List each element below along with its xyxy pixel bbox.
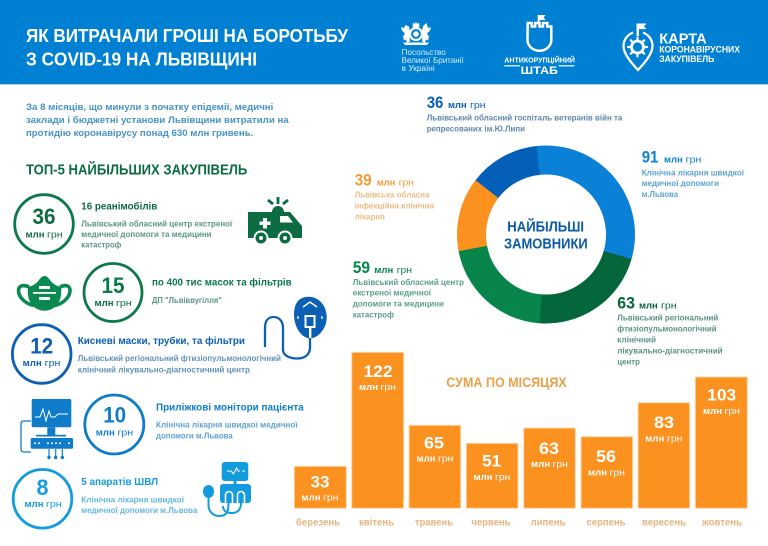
purchase 3: oxygen masks: Львівський регіональний фтизіопульмонологічний <box>78 353 281 363</box>
customer label: 39: млн <box>377 178 396 189</box>
logo: coronavirus procurement map: ЗАКУПІВЕЛЬ <box>659 54 715 64</box>
header band <box>0 0 768 85</box>
bar: вересень 83: вересень <box>642 518 686 529</box>
bar: березень 33: березень <box>296 517 340 529</box>
customer label: 39 <box>355 171 434 221</box>
logo: British embassy: Посольство <box>402 48 446 57</box>
amount circle 10: 10 <box>103 403 126 428</box>
purchase 1: ambulances: медичної допомоги та медицини <box>81 229 212 239</box>
icon: oxygen mask with tube <box>265 297 327 358</box>
purchase 4: monitors: Клінічна лікарня швидкої медичної <box>156 419 298 429</box>
bar: липень 63: грн <box>552 459 568 470</box>
donut centre label: ЗАМОВНИКИ <box>504 236 588 252</box>
bar: жовтень 103: грн <box>724 406 740 417</box>
customer label: 63: млн <box>639 300 658 311</box>
customer label: 36: репресованих ім.Ю.Липи <box>427 123 525 133</box>
purchase 1: ambulances <box>15 195 302 253</box>
customer label: 63: клінічний <box>617 334 656 344</box>
customer label: 63: грн <box>661 300 677 311</box>
customer label: 63: 63 <box>617 293 635 312</box>
purchase 4: monitors: допомоги м.Львова <box>156 430 233 440</box>
purchase 2: masks: ДП "Львіввугілля" <box>152 295 222 305</box>
bar: серпень 56: грн <box>610 468 625 479</box>
customer label: 63 <box>617 293 723 366</box>
amount circle 8: грн <box>46 499 62 510</box>
customer label: 36 <box>427 93 623 133</box>
bar chart: sum by month <box>294 352 747 529</box>
logo: British embassy: в Україні <box>402 64 435 73</box>
amount circle 10: грн <box>118 427 133 438</box>
chart title: СУМА ПО МІСЯЦЯХ <box>446 374 567 390</box>
amount circle 12: млн <box>23 358 42 369</box>
intro text: заклади і бюджетні установи Львівщини витратили на <box>26 115 289 126</box>
purchase 5: ventilators: медичної допомоги м.Львова <box>81 505 197 515</box>
bar: червень 51: червень <box>472 518 510 529</box>
customer label: 91: млн <box>664 155 683 166</box>
customer label: 39: 39 <box>355 171 372 190</box>
customer label: 39: Львівська обласна <box>355 190 430 200</box>
amount circle 36 <box>15 195 73 253</box>
customer label: 91: грн <box>686 155 701 166</box>
bar: червень 51: 51 <box>482 452 501 471</box>
bar: вересень 83: 83 <box>654 413 674 432</box>
amount circle 36: 36 <box>32 204 56 229</box>
intro text: протидію коронавірусу понад 630 млн гривень. <box>26 128 253 139</box>
bar: серпень 56: млн <box>588 468 607 479</box>
icon: ambulance <box>248 197 302 246</box>
logo: coronavirus procurement map <box>624 24 740 70</box>
customer label: 59: 59 <box>353 258 370 277</box>
title <box>26 26 349 69</box>
logo: anticorruption headquarters <box>504 15 575 77</box>
bar: квітень 122: грн <box>380 382 396 393</box>
purchase 1: ambulances: 16 реанімобілів <box>81 200 158 212</box>
logo: anticorruption headquarters: АНТИКОРУПЦІЙНИЙ <box>504 56 575 65</box>
customer label: 59: допомоги та медицини <box>353 299 444 309</box>
customer label: 59 <box>353 258 464 320</box>
customer label: 59: грн <box>397 265 412 276</box>
title: З COVID-19 НА ЛЬВІВЩИНІ <box>26 49 257 69</box>
amount circle 15: грн <box>116 298 132 309</box>
logo: coronavirus procurement map: КОРОНАВІРУСНИХ <box>659 45 740 55</box>
bar: червень 51 <box>466 443 518 529</box>
purchase 5: ventilators: 5 апаратів ШВЛ <box>81 476 158 488</box>
bar: квітень 122 <box>352 352 404 529</box>
amount circle 12: 12 <box>30 333 53 358</box>
amount circle 36: грн <box>47 229 63 240</box>
bar: липень 63 <box>524 428 575 529</box>
donut chart: biggest customers <box>441 130 651 339</box>
bar: березень 33: грн <box>323 493 338 504</box>
heading: top 5 purchases: ТОП-5 НАЙБІЛЬШИХ ЗАКУПІВЕЛЬ <box>26 161 247 179</box>
icon: face mask <box>18 276 70 311</box>
customer label: 39: грн <box>399 178 414 189</box>
amount circle 36: млн <box>26 229 45 240</box>
amount circle 10: млн <box>96 427 115 438</box>
intro text: За 8 місяців, що минули з початку епідемії, медичні <box>26 102 273 113</box>
bar: серпень 56 <box>581 437 633 529</box>
intro text <box>26 102 289 139</box>
customer label: 59: млн <box>374 265 394 276</box>
donut centre label <box>504 217 588 252</box>
amount circle 8: 8 <box>36 475 48 500</box>
bar: квітень 122: млн <box>359 382 378 393</box>
bar: травень 65: 65 <box>424 434 444 452</box>
purchase 3: oxygen masks <box>12 297 327 383</box>
logo: British embassy <box>401 22 464 73</box>
bar: жовтень 103: млн <box>703 406 722 417</box>
bar: серпень 56: 56 <box>596 447 616 466</box>
bar: жовтень 103: жовтень <box>701 518 742 529</box>
purchase 4: monitors <box>21 395 304 459</box>
bar: травень 65: травень <box>415 518 453 529</box>
customer label: 63: Львівський регіональний <box>617 313 718 323</box>
purchase 5: ventilators: Клінічна лікарня швидкої <box>81 494 185 504</box>
amount circle 8 <box>13 470 72 528</box>
bar: липень 63: липень <box>530 518 566 529</box>
amount circle 12 <box>12 325 71 383</box>
customer label: 36: 36 <box>427 93 443 112</box>
bar: червень 51: млн <box>474 472 493 483</box>
bar: червень 51: грн <box>495 472 510 483</box>
customer label: 91: медичної допомоги <box>642 178 719 188</box>
customer label: 59: Львівський обласний центр <box>353 277 464 287</box>
customer label: 63: центр <box>617 356 640 366</box>
bar: вересень 83 <box>638 403 690 529</box>
customer label: 91 <box>642 148 745 199</box>
icon: ventilator <box>203 462 251 516</box>
purchase 2: masks: по 400 тис масок та фільтрів <box>152 276 292 288</box>
bar: липень 63: 63 <box>539 439 559 458</box>
purchase 3: oxygen masks: Кисневі маски, трубки, та фільтри <box>78 335 245 347</box>
purchase 4: monitors: Приліжкові монітори пацієнта <box>156 402 304 414</box>
donut centre label: НАЙБІЛЬШІ <box>507 217 584 235</box>
purchase 2: masks <box>18 264 292 322</box>
bar: квітень 122: 122 <box>364 362 392 381</box>
bar: травень 65: млн <box>416 454 436 465</box>
bar: березень 33: 33 <box>310 473 330 492</box>
purchase 1: ambulances: Львівський обласний центр екстреної <box>81 218 233 228</box>
logo: British embassy: Великої Британії <box>402 56 464 65</box>
purchase 1: ambulances: катастроф <box>81 240 122 250</box>
amount circle 12: грн <box>45 358 60 369</box>
amount circle 15: млн <box>94 298 114 309</box>
bar: травень 65: грн <box>438 454 454 465</box>
customer label: 59: екстреної медичної <box>353 288 432 298</box>
customer label: 39: лікарня <box>355 211 385 221</box>
customer label: 91: м.Львова <box>642 189 678 199</box>
customer label: 91: Клінічна лікарня швидкої <box>642 167 745 177</box>
customer label: 91: 91 <box>642 148 658 167</box>
bar: березень 33 <box>294 466 346 529</box>
icon: patient monitor <box>21 399 73 459</box>
bar: березень 33: млн <box>302 493 321 504</box>
customer label: 36: грн <box>470 100 486 111</box>
logo: coronavirus procurement map: КАРТА <box>659 32 707 48</box>
customer label: 36: млн <box>448 100 467 111</box>
purchase 5: ventilators <box>13 462 251 528</box>
customer label: 63: фтизіопульмонологічний <box>617 324 717 334</box>
amount circle 15 <box>84 264 142 322</box>
customer label: 59: катастроф <box>353 310 394 320</box>
bar: вересень 83: млн <box>645 434 665 445</box>
bar: травень 65 <box>409 425 461 529</box>
bar: жовтень 103 <box>695 377 747 529</box>
customer label: 63: лікувально-діагностичний <box>617 345 723 355</box>
bar: жовтень 103: 103 <box>707 386 736 405</box>
bar: серпень 56: серпень <box>586 518 626 529</box>
title: ЯК ВИТРАЧАЛИ ГРОШІ НА БОРОТЬБУ <box>26 26 349 46</box>
logo: anticorruption headquarters: ШТАБ <box>521 65 558 77</box>
bar: липень 63: млн <box>531 459 550 470</box>
bar: вересень 83: грн <box>667 434 682 445</box>
bar: квітень 122: квітень <box>359 518 394 529</box>
customer label: 39: інфекційна клінічна <box>355 200 434 210</box>
amount circle 10 <box>85 395 144 454</box>
amount circle 8: млн <box>24 499 44 510</box>
customer label: 36: Львівський обласний госпіталь ветеранів війн та <box>427 113 623 123</box>
amount circle 15: 15 <box>102 273 124 298</box>
purchase 3: oxygen masks: клінічний лікувально-діагностичний центр <box>78 364 250 374</box>
